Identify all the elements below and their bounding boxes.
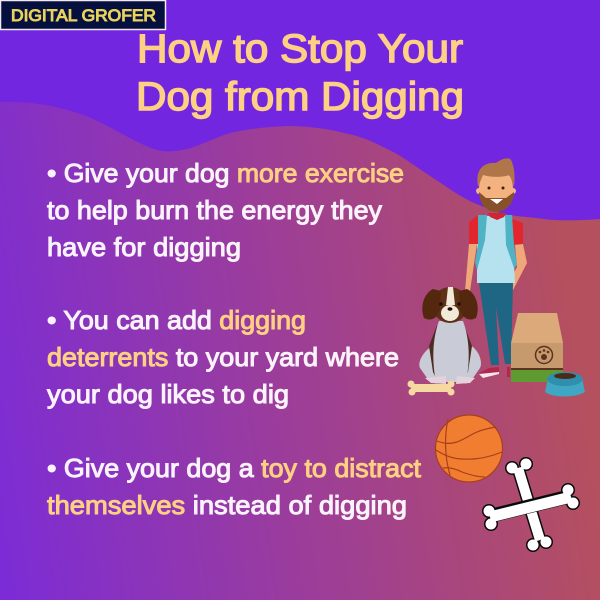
icon: dog food bag	[511, 313, 563, 382]
icon: basketball	[436, 415, 502, 482]
tip: exercise	[47, 158, 404, 262]
tip: toy distraction: themselves instead of digging	[47, 490, 407, 520]
tip: exercise: • Give your dog more exercise	[47, 158, 404, 188]
title: How to Stop Your	[137, 27, 463, 71]
tip: digging deterrents: deterrents to your yard where	[47, 342, 399, 372]
title	[136, 27, 464, 119]
bone: vertical	[505, 457, 553, 552]
icon: small bone	[408, 380, 454, 396]
tip: toy distraction: • Give your dog a toy to distract	[47, 453, 422, 483]
illustration: man	[465, 158, 527, 378]
tip: digging deterrents: your dog likes to dig	[47, 379, 289, 409]
title: Dog from Digging	[136, 75, 464, 119]
tip: exercise: have for digging	[47, 232, 241, 262]
bone: horizontal	[482, 483, 580, 531]
icon: food bowl	[545, 372, 585, 396]
icon: crossed bones	[482, 457, 580, 552]
tip: toy distraction	[47, 453, 422, 520]
logo: Digital Grofer: DIGITAL GROFER	[11, 7, 156, 25]
top wave band	[0, 0, 600, 220]
tip: digging deterrents	[47, 305, 399, 409]
tip: exercise: to help burn the energy they	[47, 195, 382, 225]
illustration: dog	[419, 287, 481, 384]
logo: Digital Grofer	[0, 0, 166, 30]
tip: digging deterrents: • You can add digging	[47, 305, 306, 335]
